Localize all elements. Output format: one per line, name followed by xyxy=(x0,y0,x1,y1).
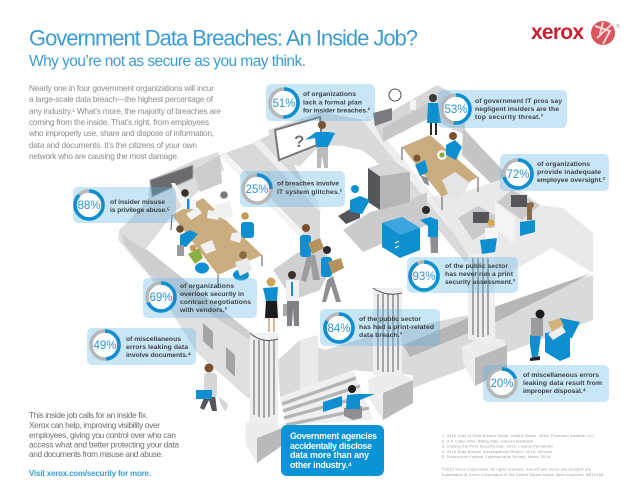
footnotes: 1. 2016 Cost of Data Breach Study: United States, 2016, Ponemon Institute LLC xyxy=(442,434,594,438)
closing text xyxy=(29,410,179,459)
callout: government agencies: data more than any xyxy=(290,450,369,460)
callout: 88%: is privilege abuse.⁵ xyxy=(110,207,170,214)
column 1 xyxy=(245,333,290,463)
corridor jagged wall xyxy=(273,243,333,300)
person: green shirt xyxy=(188,245,209,274)
callout: 69%: contract negotiations xyxy=(180,299,251,306)
callout: 69%: overlook security in xyxy=(180,291,244,298)
callout: 20%: of miscellaneous errors xyxy=(523,372,599,379)
callout: 25%: IT system glitches.² xyxy=(277,189,343,196)
callout: 69%: of organizations xyxy=(180,283,234,290)
closing text: and documents from misuse and abuse. xyxy=(29,449,163,459)
callout: 20% xyxy=(483,365,609,402)
column 2 xyxy=(368,288,413,420)
callout: 53%: of government IT pros say xyxy=(475,98,562,105)
stairs xyxy=(280,370,373,425)
person: at printer xyxy=(420,206,438,253)
callout: 93%: of the public sector xyxy=(445,263,508,270)
left outer wall xyxy=(118,228,250,400)
intro text: data and documents. It’s the citizens of your own xyxy=(29,140,197,150)
callout: 88% xyxy=(73,187,176,223)
callout: 25% xyxy=(240,171,345,207)
logo: xerox: ® xyxy=(616,23,620,30)
callout: 72% xyxy=(500,154,609,191)
subtitle: Why you’re not as secure as you may think. xyxy=(29,53,306,70)
callout: 69%: with vendors.² xyxy=(179,307,228,314)
callout: 20%: leaking data result from xyxy=(523,380,602,387)
intro text: network who are causing the most damage. xyxy=(29,151,179,161)
person: break room standing xyxy=(427,94,441,135)
callout: 53%: 53% xyxy=(444,104,468,116)
callout: 49%: 49% xyxy=(93,340,117,352)
person: on stairs xyxy=(323,385,375,420)
person: raised arm xyxy=(171,183,196,209)
callout: 84%: of the public sector xyxy=(359,316,421,323)
callout: 69%: 69% xyxy=(149,292,173,304)
intro text: a large-scale data breach—the highest percentage of xyxy=(29,94,214,104)
callout: government agencies: accidentally disclose xyxy=(290,441,372,451)
break room table xyxy=(402,135,478,210)
intro text: Nearly one in four government organizations will incur xyxy=(29,83,214,93)
person: table seated xyxy=(414,154,429,186)
callout: government agencies: Government agencies xyxy=(290,431,377,441)
person: man in shirt and tie xyxy=(283,271,299,326)
footnotes: 4. 2016 Data Breach Investigations Report, 2016, Verizon xyxy=(442,450,552,454)
person: grey hair xyxy=(213,191,233,220)
intro text: who improperly use, share and dispose of information, xyxy=(28,128,214,138)
callout: 25%: of breaches involve xyxy=(277,180,339,188)
callout: 84%: data breach.³ xyxy=(359,332,403,339)
footnotes: trademarks of Xerox Corporation in the United States and/or other countries. BR15168 xyxy=(442,473,603,477)
person: man with box xyxy=(321,246,344,302)
upper room and right diagonal wall xyxy=(268,112,478,262)
callout: 84%: 84% xyxy=(327,323,351,335)
callout: 49%: of miscellaneous xyxy=(126,336,181,343)
callout: 72%: provide inadequate xyxy=(537,169,601,176)
meeting room walls xyxy=(118,132,322,250)
callout: 72%: employee oversight.² xyxy=(537,177,606,184)
person: break room seated xyxy=(446,132,462,160)
closing text: access what and better protecting your data xyxy=(29,440,179,450)
callout: 72%: 72% xyxy=(506,169,530,181)
callout: 51% xyxy=(266,84,375,121)
closing text: employees, giving you control over who can xyxy=(29,430,176,440)
logo: xerox xyxy=(531,21,620,45)
footnotes: ©2015 Xerox Corporation. All rights reserved. Xerox® and Xerox and Design® are xyxy=(442,468,591,472)
callout: 53% xyxy=(438,90,567,128)
intro text xyxy=(28,83,221,161)
footnotes: 5. Solarwinds Federal Cybersecurity Survey, March 2016 xyxy=(442,455,550,459)
whiteboard xyxy=(275,117,322,160)
intro text: coming from the inside. That’s right, from employees xyxy=(29,117,209,127)
callout: 93%: 93% xyxy=(412,271,436,283)
closing text: Xerox can help, improving visibility over xyxy=(29,420,160,430)
callout: 49%: involve documents.⁴ xyxy=(126,352,191,359)
callout: government agencies: other industry.⁴ xyxy=(290,460,352,470)
sofa along right wall xyxy=(462,128,510,195)
callout: 49%: errors leaking data xyxy=(126,344,188,351)
building illustration xyxy=(118,85,593,463)
callout: 53%: negligent insiders are the xyxy=(475,106,559,113)
cubicles xyxy=(458,190,540,245)
footnotes: 3. Closing the Print Security Gap, 2015, Louella Fernandes xyxy=(442,444,553,448)
link text: Visit xerox.com/security for more. xyxy=(29,469,151,478)
front jagged wall by printer xyxy=(343,192,427,252)
person: cubicle 1 xyxy=(480,220,498,254)
person: seated left xyxy=(176,225,198,256)
printer rack xyxy=(368,160,410,210)
callout: 20%: 20% xyxy=(490,378,514,390)
meeting room board xyxy=(150,165,193,197)
callout: 93% xyxy=(407,257,518,293)
whiteboard: ? xyxy=(294,132,304,151)
column 3 xyxy=(462,253,507,386)
pale right wall xyxy=(430,178,593,275)
callout: 84%: has had a print-related xyxy=(359,324,434,331)
person: cubicle 2 xyxy=(520,202,535,236)
callout: 49% xyxy=(87,328,196,365)
meeting table xyxy=(171,198,262,288)
callout: 93%: security assessment.³ xyxy=(445,279,516,286)
printer xyxy=(382,217,420,258)
callout: 51%: of organizations xyxy=(303,91,356,98)
person: walking with folder xyxy=(196,364,228,412)
callout: 51%: lack a formal plan xyxy=(303,100,362,106)
callout: government agencies xyxy=(281,425,384,476)
footnotes: 2. U.S. Cybercrime: Rising risks, reduced readiness xyxy=(442,440,533,444)
disposal bin xyxy=(545,318,580,361)
title: Government Data Breaches: An Inside Job? xyxy=(29,26,418,50)
callout: 72%: of organizations xyxy=(537,161,590,168)
clock xyxy=(389,89,401,101)
break room counter xyxy=(373,85,465,142)
footnotes xyxy=(442,434,603,477)
logo: xerox: xerox xyxy=(531,21,584,44)
intro text: any industry.¹ What’s more, the majority of breaches are xyxy=(29,106,221,116)
callout: 88%: 88% xyxy=(77,200,101,212)
callout: 93%: has never run a print xyxy=(445,271,514,278)
callout: 51%: for insider breaches.² xyxy=(303,108,371,114)
floor front band xyxy=(278,273,593,397)
closing text: This inside job calls for an inside fix. xyxy=(29,410,148,420)
callout: 20%: improper disposal.⁴ xyxy=(523,388,586,395)
person: at disposal bin xyxy=(530,310,544,361)
callout: 84% xyxy=(320,309,440,346)
person: woman with box xyxy=(300,224,324,282)
callout: 88%: of insider misuse xyxy=(110,199,165,206)
person: blue seated right xyxy=(241,212,254,238)
callout: 69% xyxy=(143,278,257,318)
person: kneeling at rack xyxy=(338,185,370,224)
people xyxy=(171,94,580,420)
person: bottom of table xyxy=(233,251,252,280)
callout: 51%: 51% xyxy=(272,98,296,110)
person: woman with black skirt xyxy=(263,278,278,332)
callout: 25%: 25% xyxy=(245,184,269,196)
callout: 53%: top security threat.³ xyxy=(475,114,544,121)
person: at whiteboard xyxy=(305,121,335,168)
